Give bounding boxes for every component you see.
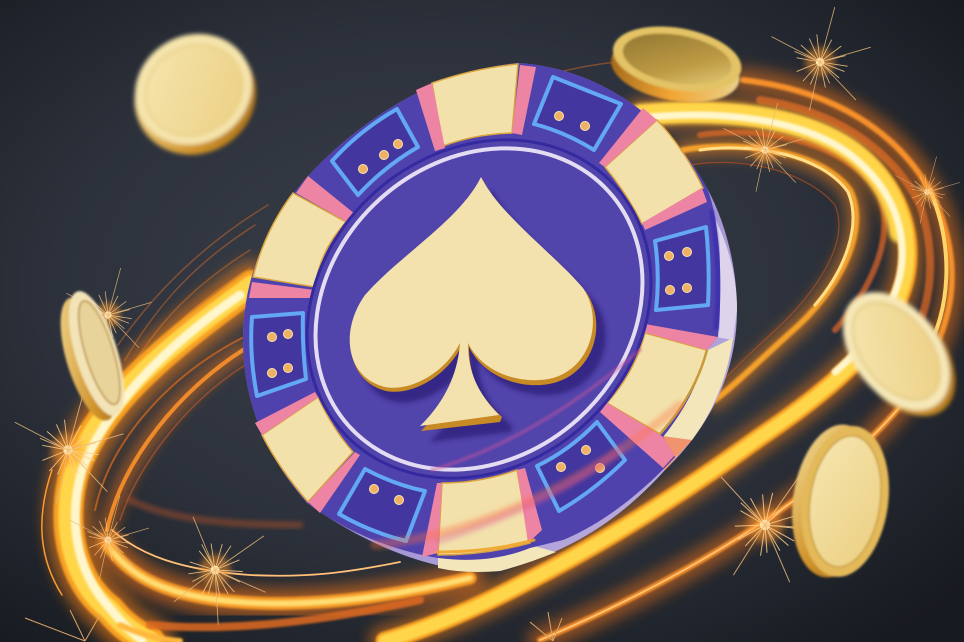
- spade shadow: [360, 190, 606, 442]
- dark outer strip at right edge: [711, 210, 718, 330]
- glass rim: [243, 63, 737, 571]
- faint brown streaks upper left: [118, 60, 680, 378]
- gold edge on lower right: [660, 350, 707, 434]
- rim highlights: [438, 220, 737, 572]
- spade: [350, 177, 593, 426]
- dice panels: [251, 77, 709, 541]
- chip face: [243, 63, 720, 560]
- coin: left: [48, 285, 136, 427]
- coin: lower right: [783, 419, 898, 585]
- inner left ring: [95, 338, 245, 530]
- inner disc: [236, 68, 722, 550]
- main bright band: left: [42, 285, 252, 641]
- main bright band: right: [385, 113, 908, 641]
- outer orange ring: [540, 80, 952, 640]
- poker chip: [236, 63, 737, 572]
- cream segments: [253, 64, 707, 555]
- pink dividers: [249, 65, 718, 557]
- lower sweep: [108, 500, 470, 627]
- inner right ring: [683, 132, 884, 400]
- coin: top left: [111, 13, 277, 177]
- coin: right: [821, 271, 964, 437]
- dice dots: [268, 112, 692, 504]
- coin: top centre: [606, 17, 747, 112]
- light streaks over chip: [375, 350, 680, 552]
- spade gold edge: [351, 180, 596, 431]
